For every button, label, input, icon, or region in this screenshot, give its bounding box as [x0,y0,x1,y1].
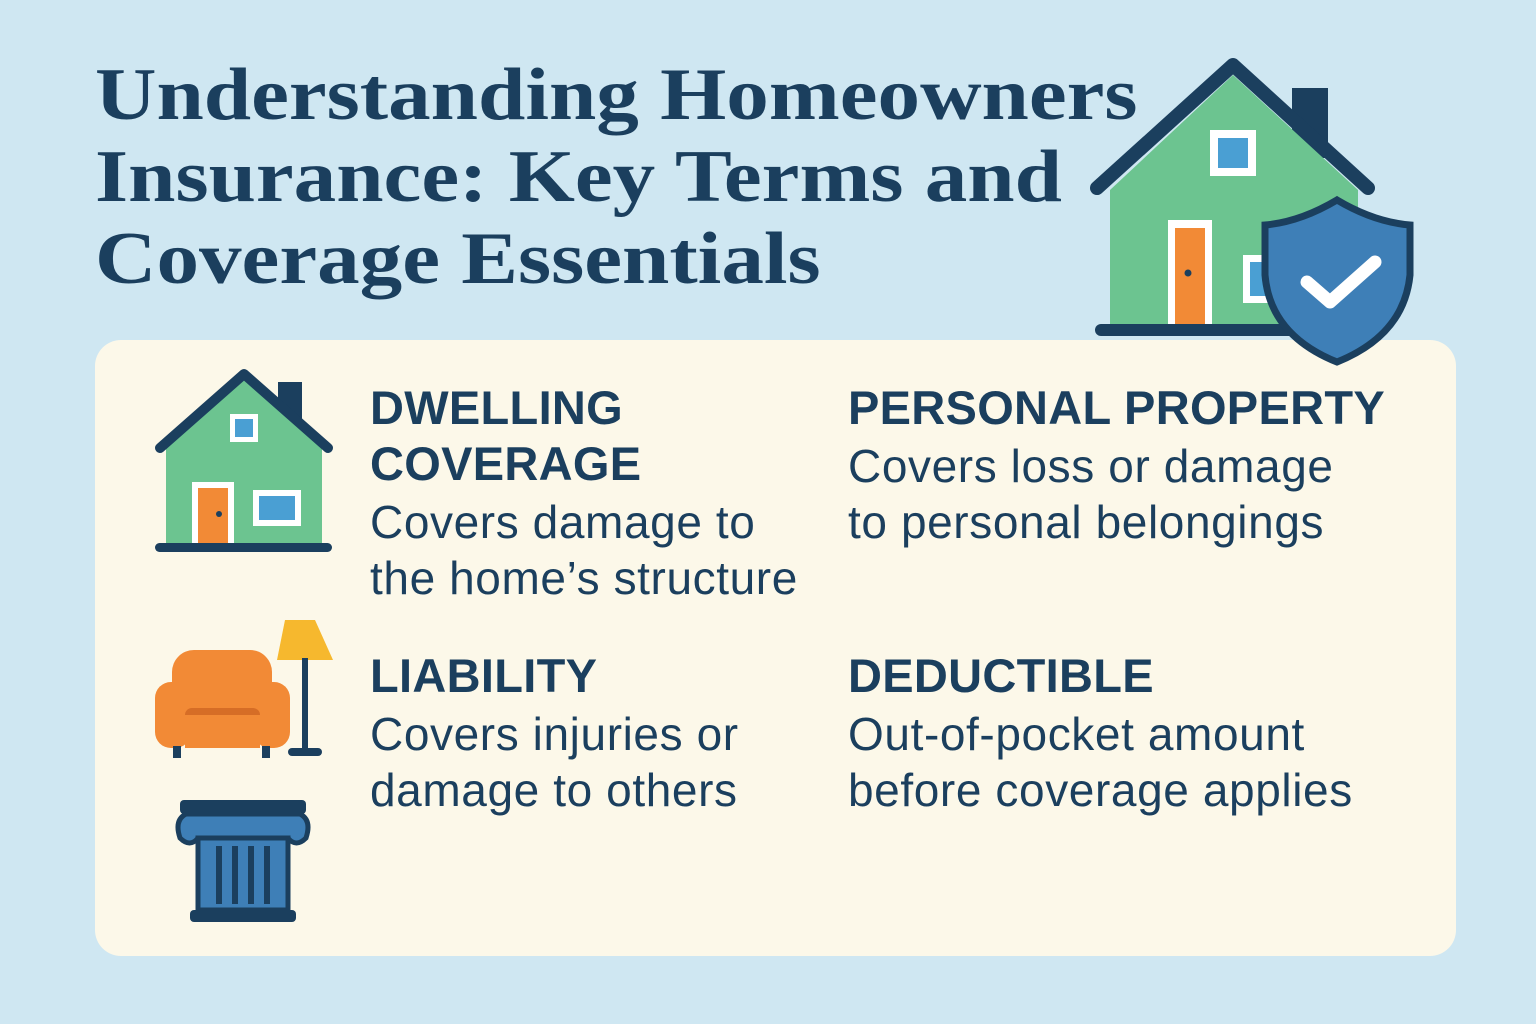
title: Coverage Essentials [95,218,821,300]
title: Insurance: Key Terms and [95,136,1062,218]
text block: personal property: Covers loss or damage [848,440,1334,492]
text block: deductible [848,649,1353,816]
text block: deductible: before coverage applies [848,764,1353,816]
text block: deductible: DEDUCTIBLE [848,649,1154,702]
text block: personal property [848,381,1385,548]
text block: liability: Covers injuries or [370,708,739,760]
title [95,54,1138,300]
text block: dwelling coverage: COVERAGE [370,437,641,490]
icon: column [175,800,311,922]
text block: dwelling coverage: the home’s structure [370,552,798,604]
text block: dwelling coverage: DWELLING [370,381,623,434]
icon: sofa and lamp [155,620,333,758]
icon: small house [155,369,333,552]
text block: deductible: Out-of-pocket amount [848,708,1305,760]
text block: dwelling coverage: Covers damage to [370,496,755,548]
text block: personal property: to personal belongings [848,496,1324,548]
text block: liability [370,649,739,816]
text block: liability: LIABILITY [370,649,597,702]
text block: liability: damage to others [370,764,738,816]
panel: key terms [95,340,1456,956]
text block: personal property: PERSONAL PROPERTY [848,381,1385,434]
text block: dwelling coverage [370,381,798,604]
icon: house with shield [1090,58,1414,366]
title: Understanding Homeowners [95,54,1138,136]
